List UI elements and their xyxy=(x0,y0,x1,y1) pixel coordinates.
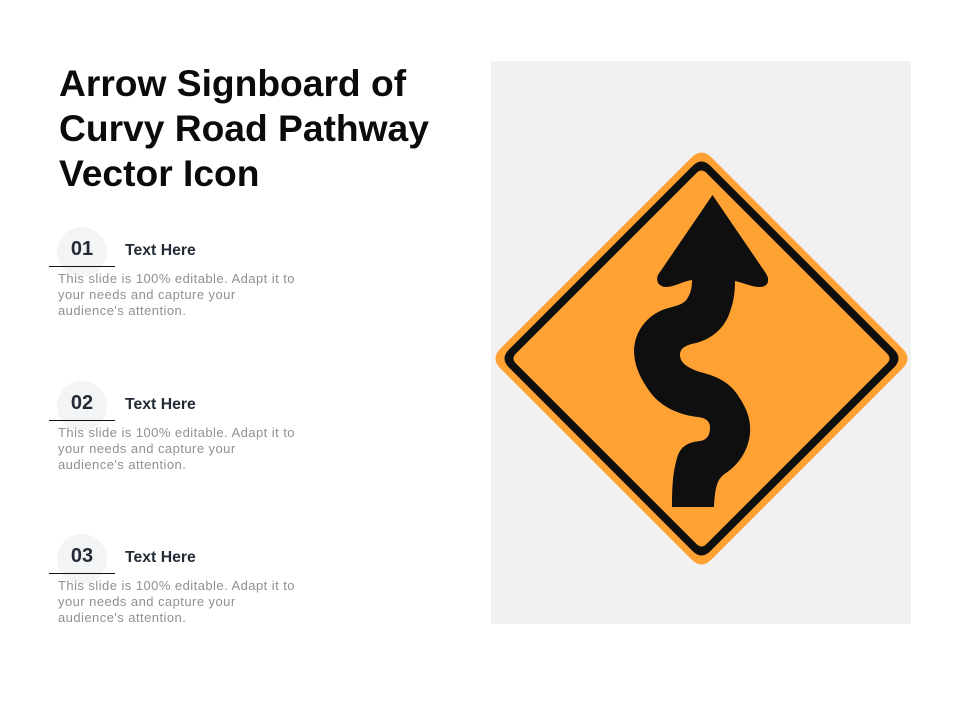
arrow: winding road xyxy=(634,195,768,507)
item description 03: your needs and capture your xyxy=(58,594,236,609)
item description 03: This slide is 100% editable. Adapt it to xyxy=(58,578,295,593)
number 02: 02 xyxy=(71,392,93,414)
title: Vector Icon xyxy=(59,152,259,194)
item description 03 xyxy=(58,578,295,625)
title xyxy=(59,62,429,194)
item description 01: your needs and capture your xyxy=(58,287,236,302)
list item 01 xyxy=(49,227,295,318)
number badge 01 xyxy=(57,227,107,277)
number badge 03 xyxy=(57,534,107,584)
list item 03 xyxy=(49,534,295,625)
sign diamond xyxy=(496,152,908,564)
number badge 02 xyxy=(57,381,107,431)
item description 01: This slide is 100% editable. Adapt it to xyxy=(58,271,295,286)
number 03: 03 xyxy=(71,545,93,567)
item description 02: audience's attention. xyxy=(58,457,186,472)
panel: grey icon background xyxy=(491,61,911,624)
item heading 03: Text Here xyxy=(125,549,196,566)
number 01: 01 xyxy=(71,238,93,260)
item description 02 xyxy=(58,425,295,472)
title: Curvy Road Pathway xyxy=(59,107,429,149)
item description 02: This slide is 100% editable. Adapt it to xyxy=(58,425,295,440)
list item 02 xyxy=(49,381,295,472)
item description 02: your needs and capture your xyxy=(58,441,236,456)
item description 03: audience's attention. xyxy=(58,610,186,625)
item heading 02: Text Here xyxy=(125,396,196,413)
item description 01: audience's attention. xyxy=(58,303,186,318)
title: Arrow Signboard of xyxy=(59,62,406,104)
item heading 01: Text Here xyxy=(125,242,196,259)
item description 01 xyxy=(58,271,295,318)
